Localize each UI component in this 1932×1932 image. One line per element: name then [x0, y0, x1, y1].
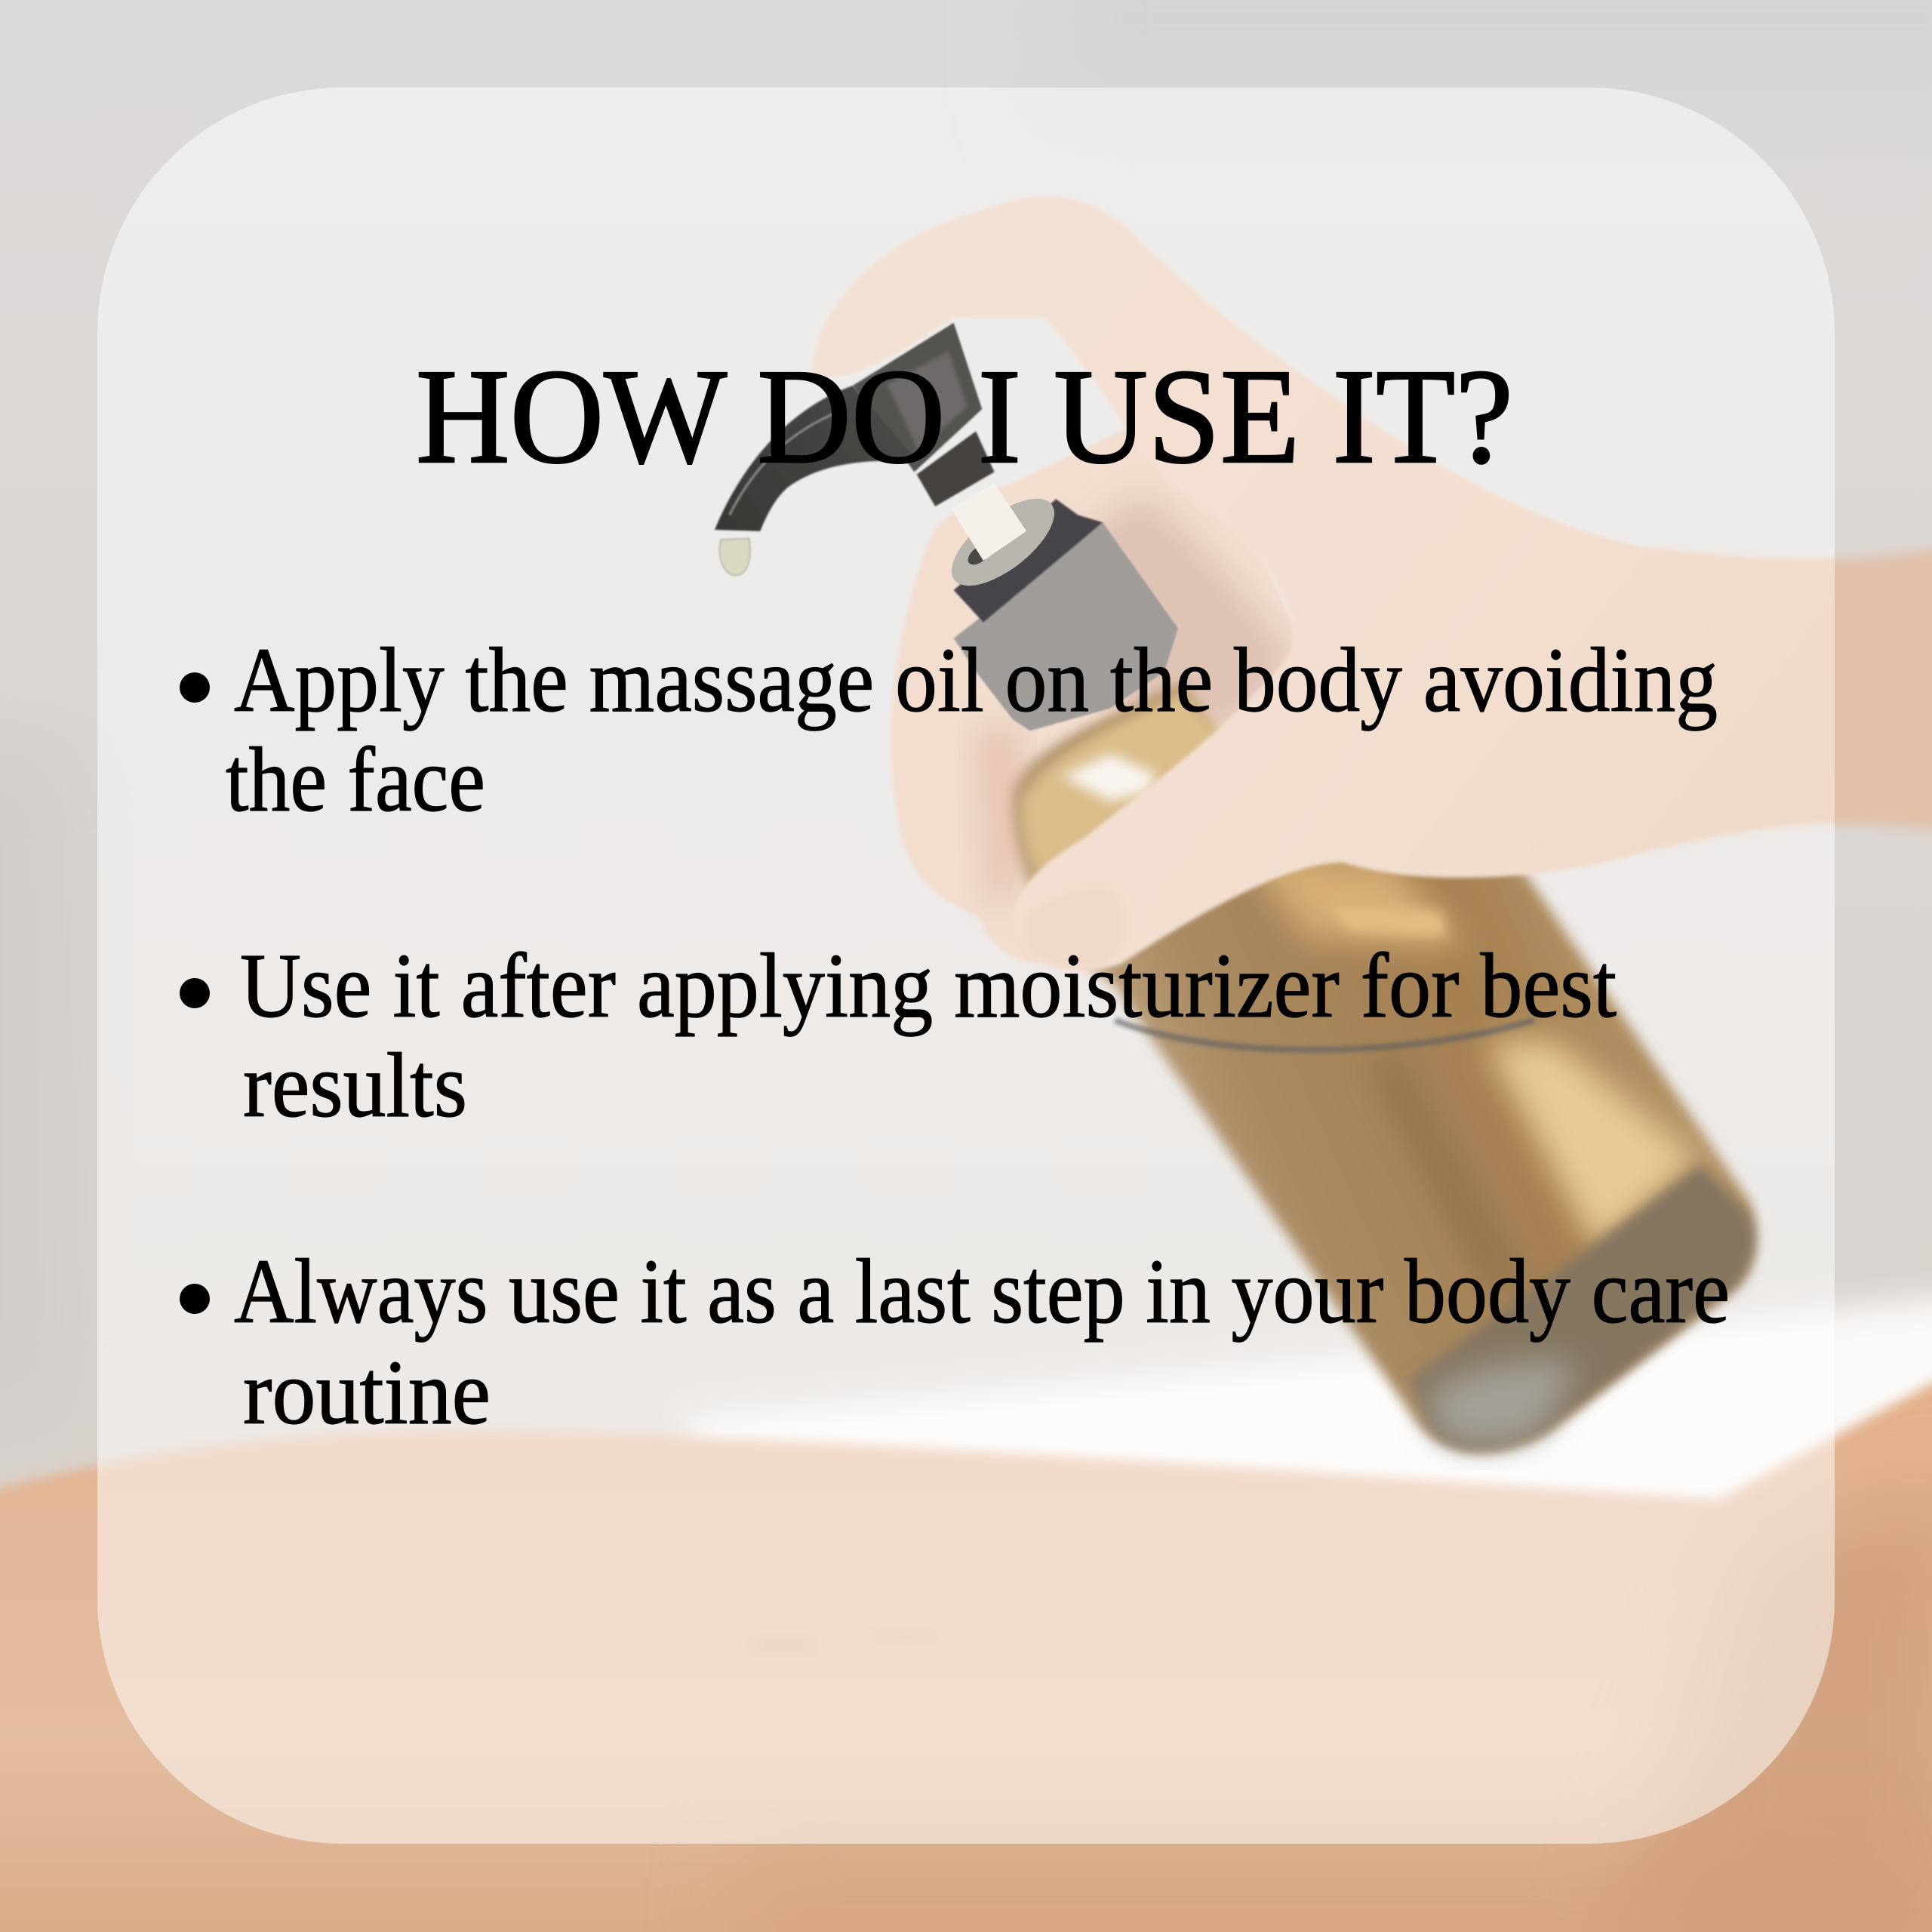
- lower dark base: [1410, 1164, 1755, 1451]
- title: HOW DO I USE IT?: [416, 341, 1513, 491]
- bullet 1: the face: [226, 729, 485, 831]
- hand and bottle photo seen through panel: [715, 197, 1932, 1451]
- amber highlight: [1484, 1041, 1698, 1251]
- bottle: [1012, 684, 1755, 1451]
- amber upper patches: [1244, 851, 1466, 949]
- outer wrist: [1651, 542, 1932, 851]
- skin marks: [746, 1636, 820, 1654]
- skin foreground: [0, 1361, 1932, 1932]
- black band: [954, 499, 1103, 623]
- finger shadow next to bottle: [974, 727, 1023, 912]
- ribbed cap: [954, 522, 1178, 731]
- white sheet: [690, 1294, 1932, 1528]
- bullet 2: results: [243, 1035, 467, 1137]
- bullet 2: Use it after applying moisturizer for best: [240, 935, 1617, 1037]
- stem: [951, 483, 1026, 561]
- pump: [715, 323, 1026, 561]
- pump head: [853, 323, 982, 472]
- front hand: [811, 197, 1932, 970]
- bottle shoulder glow: [1019, 689, 1220, 872]
- liquid line: [1115, 1020, 1534, 1050]
- palm shadow: [1095, 494, 1290, 727]
- cap: [952, 498, 1179, 732]
- top ring: [938, 483, 1068, 601]
- thumbnail: [1023, 885, 1126, 968]
- bullet 3: Always use it as a last step in your body care: [234, 1241, 1730, 1343]
- shadow stripe: [1377, 1063, 1515, 1288]
- back palm and fingers: [891, 429, 1306, 963]
- spout: [715, 386, 918, 531]
- bullet 3: [180, 1241, 1730, 1444]
- neck: [917, 431, 995, 506]
- oil drop: [720, 538, 750, 575]
- bullet 2: [180, 935, 1617, 1137]
- bullet 1: [180, 629, 1718, 831]
- bullet 1: Apply the massage oil on the body avoiding: [234, 629, 1718, 731]
- bullet 3: routine: [243, 1342, 491, 1444]
